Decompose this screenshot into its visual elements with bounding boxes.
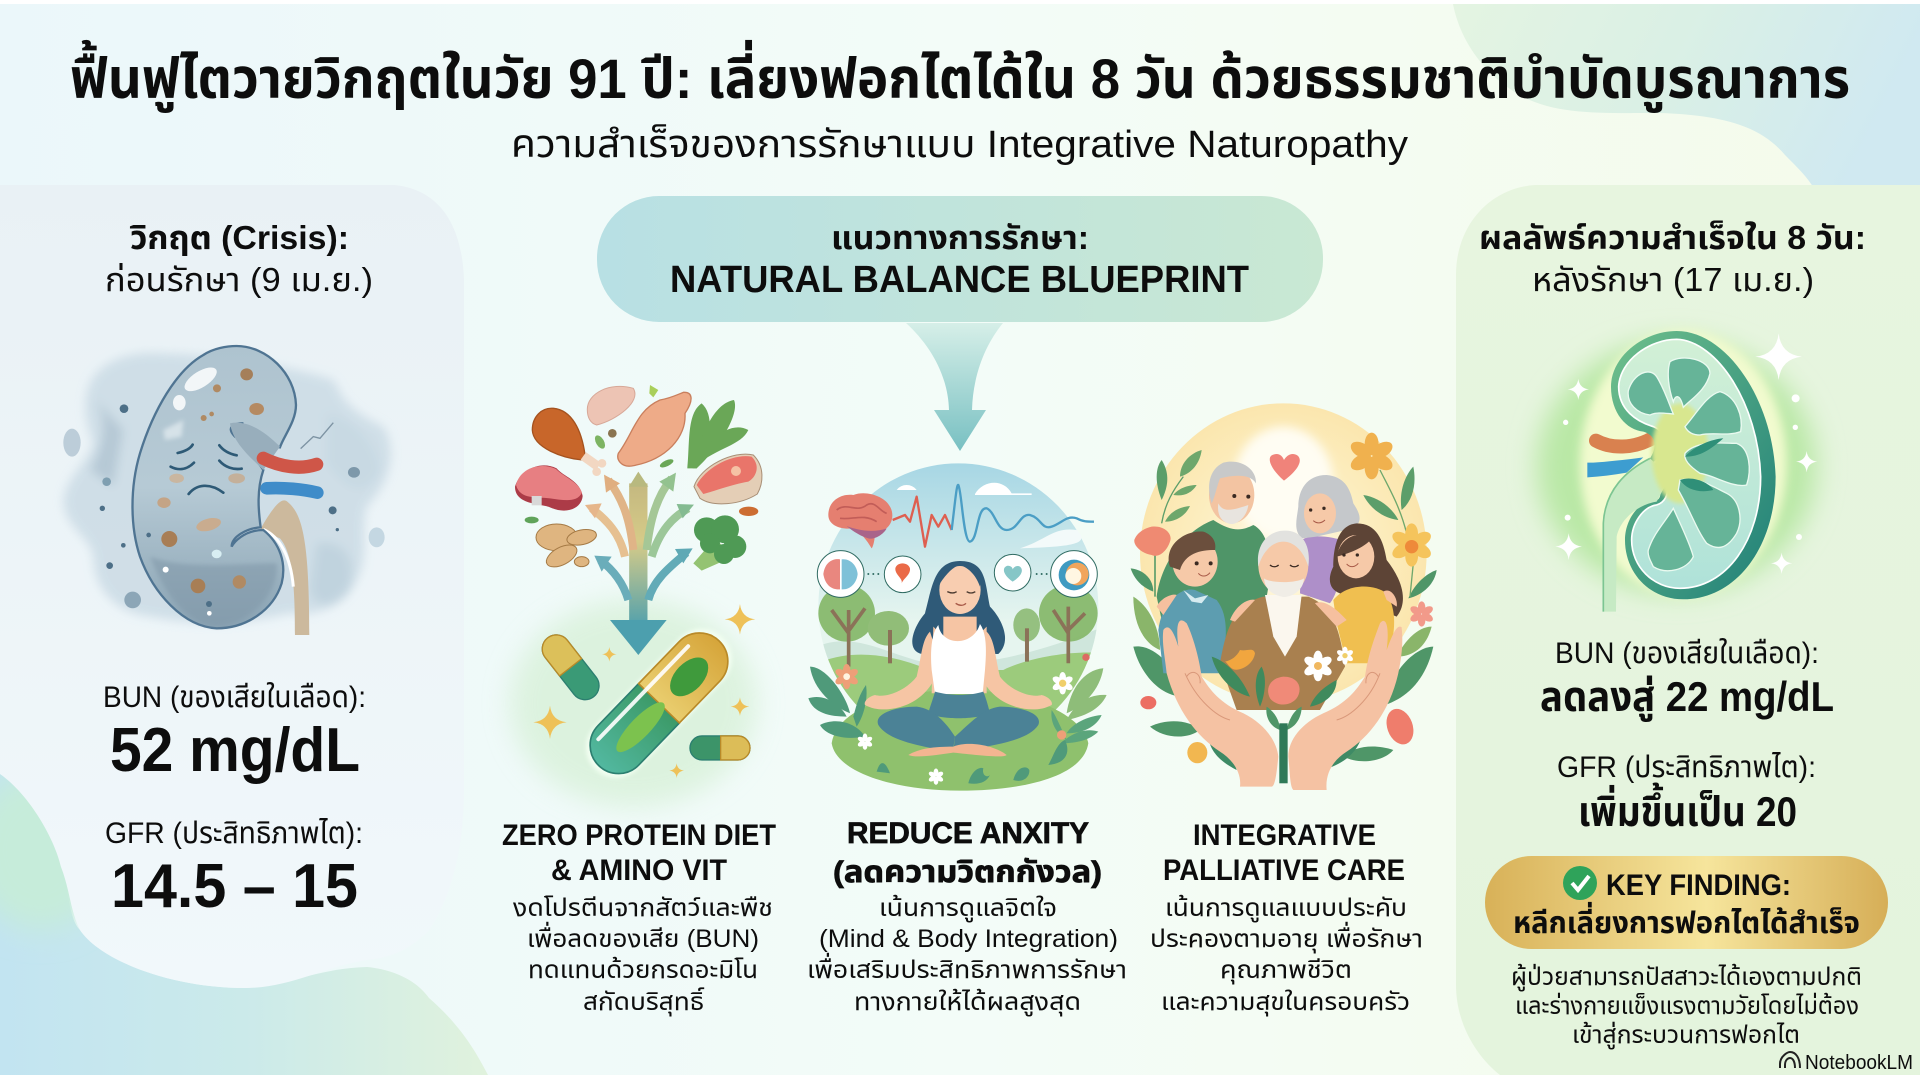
nuts bbox=[536, 524, 598, 571]
panel: reduce anxiety bbox=[807, 460, 1127, 1017]
icon: family in caring hands bbox=[1131, 403, 1437, 790]
ureter bbox=[1603, 458, 1670, 612]
halo bbox=[1140, 403, 1427, 703]
girl bbox=[1330, 523, 1403, 663]
heart bbox=[1270, 454, 1300, 481]
panel: zero protein diet bbox=[502, 385, 776, 1017]
diet description: งดโปรตีนจากสัตว์และพืช bbox=[513, 894, 773, 922]
gold sparkles bbox=[533, 604, 755, 778]
legs bbox=[928, 692, 990, 718]
anxiety heading: (ลดความวิตกกังวล) bbox=[833, 856, 1102, 889]
diet description: ทดแทนด้วยกรดอะมิโน bbox=[528, 956, 758, 984]
renal pyramids bbox=[1628, 358, 1749, 571]
tiny capsule bbox=[690, 736, 750, 760]
icon: meditating woman bbox=[808, 460, 1107, 791]
subtitle: ความสำเร็จของการรักษาแบบ Integrative Naturopathy bbox=[511, 124, 1408, 166]
face bbox=[939, 566, 981, 614]
thought bubbles bbox=[817, 551, 1097, 597]
results description bbox=[1511, 963, 1862, 1050]
results description: ผู้ป่วยสามารถปัสสาวะได้เองตามปกติ bbox=[1511, 963, 1862, 992]
right steak bbox=[694, 454, 762, 504]
care heading bbox=[1163, 819, 1405, 887]
crisis date: ก่อนรักษา (9 เม.ย.) bbox=[105, 261, 373, 298]
anxiety heading: REDUCE ANXITY bbox=[847, 817, 1089, 850]
drumstick bbox=[532, 408, 606, 476]
diet description: เพื่อลดของเสีย (BUN) bbox=[527, 921, 759, 953]
small capsule bbox=[537, 629, 605, 705]
icon: healthy kidney bbox=[1537, 330, 1817, 612]
crisis heading: วิกฤต (Crisis): bbox=[130, 219, 349, 256]
diet heading: & AMINO VIT bbox=[551, 854, 727, 887]
anxiety description bbox=[807, 894, 1127, 1017]
meadow bbox=[832, 690, 1088, 791]
cupped hands bbox=[1163, 620, 1402, 790]
anxiety description: เน้นการดูแลจิตใจ bbox=[879, 894, 1057, 923]
results BUN label: BUN (ของเสียในเลือด): bbox=[1555, 637, 1819, 670]
icon: food to amino capsule bbox=[510, 385, 762, 807]
callout: key finding bbox=[1485, 856, 1888, 949]
large capsule bbox=[574, 617, 744, 790]
results description: และร่างกายแข็งแรงตามวัยโดยไม่ต้อง bbox=[1515, 992, 1859, 1020]
centre bouquet bbox=[1212, 647, 1354, 783]
sparkles bbox=[1555, 333, 1817, 574]
elder bbox=[1220, 531, 1345, 710]
icon: damaged kidney bbox=[63, 346, 391, 635]
diet description bbox=[513, 894, 773, 1017]
panel: integrative palliative care bbox=[1131, 403, 1437, 1017]
icon: check mark bbox=[1563, 866, 1597, 900]
panel: results after 8 days bbox=[1456, 185, 1920, 1075]
arrows bbox=[592, 478, 688, 623]
side foliage bbox=[1131, 450, 1437, 770]
anxiety description: ทางกายให้ได้ผลสูงสุด bbox=[854, 988, 1081, 1017]
arms bbox=[865, 632, 940, 709]
crisis GFR value: 14.5 – 15 bbox=[111, 852, 358, 921]
anxiety description: เพื่อเสริมประสิทธิภาพการรักษา bbox=[807, 952, 1127, 984]
grandma bbox=[1296, 475, 1360, 603]
diet description: สกัดบริสุทธิ์ bbox=[583, 986, 704, 1017]
right plants bbox=[1051, 668, 1107, 743]
results GFR label: GFR (ประสิทธิภาพไต): bbox=[1557, 751, 1816, 784]
resting hands bbox=[1230, 600, 1255, 622]
crisis GFR label: GFR (ประสิทธิภาพไต): bbox=[105, 817, 363, 850]
key finding statement: หลีกเลี่ยงการฟอกไตได้สำเร็จ bbox=[1513, 901, 1860, 940]
results date: หลังรักษา (17 เม.ย.) bbox=[1532, 261, 1814, 298]
vessels bbox=[1596, 437, 1655, 447]
tank top bbox=[931, 624, 986, 694]
care description: และความสุขในครอบครัว bbox=[1161, 988, 1410, 1017]
care heading: PALLIATIVE CARE bbox=[1163, 854, 1405, 887]
hair bbox=[912, 561, 1005, 654]
care description: ประคองตามอายุ เพื่อรักษา bbox=[1150, 921, 1423, 954]
diet heading bbox=[502, 819, 776, 887]
results BUN value: ลดลงสู่ 22 mg/dL bbox=[1540, 673, 1834, 722]
kidney body bbox=[1611, 331, 1776, 599]
left steak bbox=[515, 465, 583, 511]
diet heading: ZERO PROTEIN DIET bbox=[502, 819, 776, 852]
anxiety heading bbox=[833, 817, 1102, 889]
arrow: blueprint to treatments bbox=[906, 323, 1003, 451]
salmon bbox=[618, 392, 691, 466]
results GFR value: เพิ่มขึ้นเป็น 20 bbox=[1578, 782, 1797, 835]
boy bbox=[1158, 532, 1226, 673]
blueprint name: NATURAL BALANCE BLUEPRINT bbox=[670, 259, 1249, 301]
leafy greens bbox=[687, 400, 748, 468]
care description bbox=[1150, 894, 1423, 1017]
trees bbox=[818, 585, 1098, 667]
notebooklm watermark: NotebookLM bbox=[1805, 1052, 1913, 1074]
care description: เน้นการดูแลแบบประคับ bbox=[1165, 894, 1407, 923]
broccoli bbox=[693, 515, 746, 571]
anxiety description: (Mind & Body Integration) bbox=[819, 925, 1118, 953]
flowers bbox=[1134, 433, 1434, 763]
care description: คุณภาพชีวิต bbox=[1220, 956, 1352, 985]
left plants bbox=[808, 667, 867, 738]
care heading: INTEGRATIVE bbox=[1193, 819, 1376, 852]
ground details bbox=[857, 734, 873, 750]
blueprint heading: แนวทางการรักษา: bbox=[831, 219, 1089, 256]
results heading: ผลลัพธ์ความสำเร็จใน 8 วัน: bbox=[1479, 219, 1866, 256]
crisis BUN label: BUN (ของเสียในเลือด): bbox=[103, 681, 366, 714]
chicken breast bbox=[587, 386, 635, 425]
panel: treatment blueprint header bbox=[597, 196, 1323, 322]
pelvis bbox=[1652, 403, 1708, 503]
panel: crisis before treatment bbox=[0, 185, 464, 988]
title: ฟื้นฟูไตวายวิกฤตในวัย 91 ปี: เลี่ยงฟอกไตได้ใน 8 วัน ด้วยธรรมชาติบำบัดบูรณาการ bbox=[70, 39, 1850, 113]
crisis BUN value: 52 mg/dL bbox=[110, 716, 360, 785]
key finding label: KEY FINDING: bbox=[1606, 869, 1791, 902]
results description: เข้าสู่กระบวนการฟอกไต bbox=[1572, 1021, 1800, 1050]
grandpa bbox=[1157, 462, 1270, 643]
brain and wave bbox=[828, 485, 1094, 548]
